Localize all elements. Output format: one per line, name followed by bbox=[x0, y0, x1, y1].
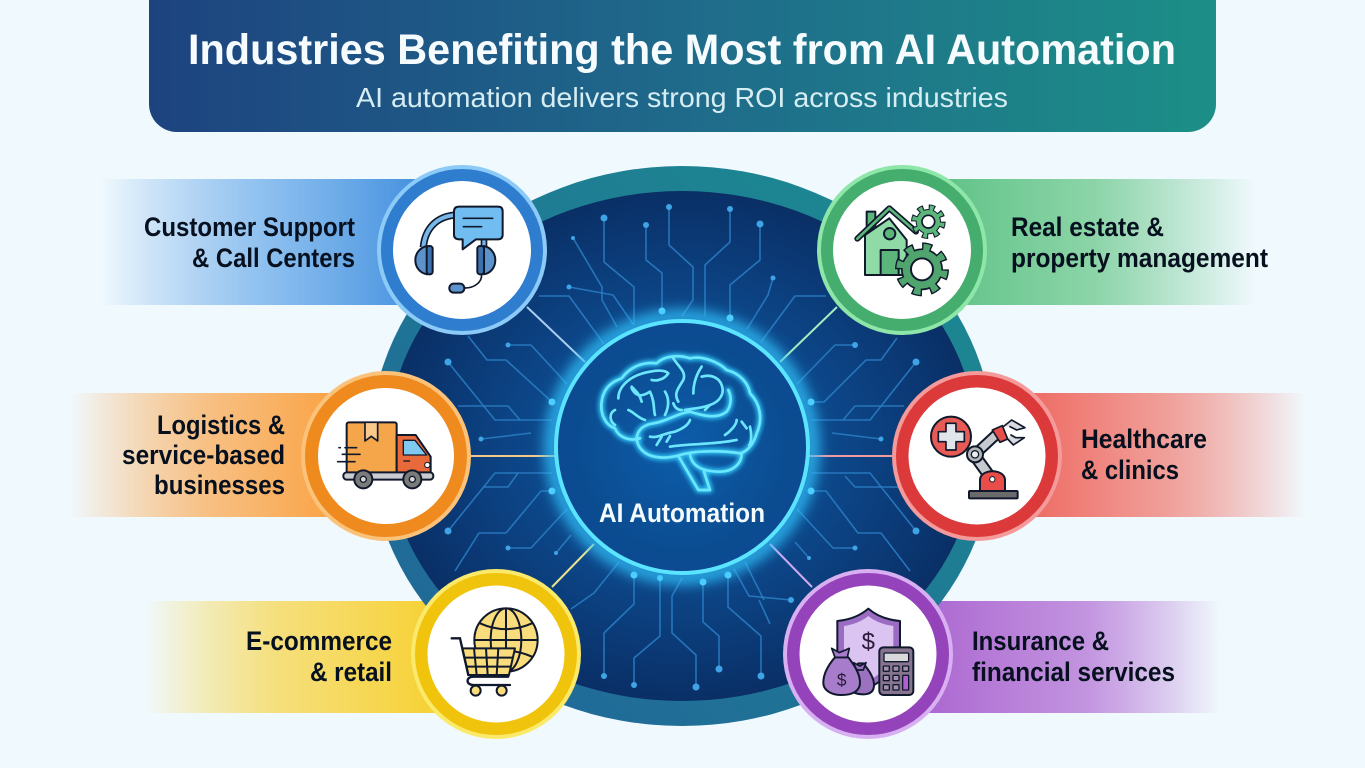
circuit traces bbox=[448, 207, 916, 687]
label: call centers: & Call Centers bbox=[192, 243, 355, 273]
node: e-commerce bbox=[411, 569, 581, 739]
icon: robotic arm with medical cross bbox=[931, 417, 1025, 498]
central AI automation circle bbox=[552, 317, 812, 577]
node: healthcare bbox=[892, 371, 1062, 541]
label: logistics: Logistics & bbox=[157, 410, 285, 440]
header banner bbox=[149, 0, 1216, 132]
icon: shopping cart with globe bbox=[452, 608, 538, 696]
node: real estate bbox=[817, 165, 987, 335]
label bar: customer support bbox=[100, 179, 430, 305]
label: service-based: service-based bbox=[122, 440, 285, 470]
label: retail: & retail bbox=[310, 657, 392, 687]
icon: house with gears bbox=[857, 208, 944, 291]
badge ring bbox=[301, 371, 471, 541]
node: logistics bbox=[301, 371, 471, 541]
central hub disc bbox=[370, 166, 994, 726]
label: customer support: Customer Support bbox=[144, 212, 355, 242]
label: real estate: Real estate & bbox=[1011, 212, 1164, 242]
label bar: real estate bbox=[930, 179, 1255, 305]
icon: shield, money bags and calculator bbox=[823, 609, 913, 695]
subtitle: AI automation delivers strong ROI across industries bbox=[356, 82, 1008, 113]
badge ring bbox=[377, 165, 547, 335]
central label: AI Automation bbox=[599, 498, 765, 528]
header background bbox=[149, 0, 1216, 132]
node: insurance bbox=[783, 569, 953, 739]
outer ring bbox=[370, 166, 994, 726]
label: businesses: businesses bbox=[154, 470, 285, 500]
label bar: healthcare bbox=[1020, 393, 1305, 517]
label bar: insurance bbox=[920, 601, 1220, 713]
small gear bbox=[915, 208, 942, 235]
label bar: logistics bbox=[70, 393, 350, 517]
circuit nodes bbox=[444, 204, 920, 690]
badge ring bbox=[783, 569, 953, 739]
label: e-commerce: E-commerce bbox=[246, 626, 392, 656]
large gear bbox=[900, 247, 944, 291]
label: healthcare: Healthcare bbox=[1081, 424, 1207, 454]
icon: shield, money bags and calculator: $ bbox=[837, 670, 847, 690]
node: customer support bbox=[377, 165, 547, 335]
label: insurance: Insurance & bbox=[972, 626, 1109, 656]
icon: delivery truck bbox=[338, 422, 433, 488]
badge ring bbox=[411, 569, 581, 739]
icon: headset with speech bubble bbox=[415, 207, 503, 293]
glow halo bbox=[552, 317, 812, 577]
connector lines bbox=[470, 307, 895, 587]
badge ring bbox=[892, 371, 1062, 541]
title: Industries Benefiting the Most from AI Automation bbox=[188, 26, 1176, 74]
core fill and ring bbox=[556, 321, 808, 573]
labels bbox=[122, 212, 1268, 687]
badge ring bbox=[817, 165, 987, 335]
inner dark disc bbox=[387, 191, 977, 701]
label bar: e-commerce bbox=[145, 601, 445, 713]
label: clinics: & clinics bbox=[1081, 455, 1179, 485]
icon: shield, money bags and calculator: $ bbox=[862, 628, 875, 655]
icon: brain bbox=[601, 356, 760, 490]
label: financial services: financial services bbox=[972, 657, 1175, 687]
label: property management: property management bbox=[1011, 243, 1268, 273]
